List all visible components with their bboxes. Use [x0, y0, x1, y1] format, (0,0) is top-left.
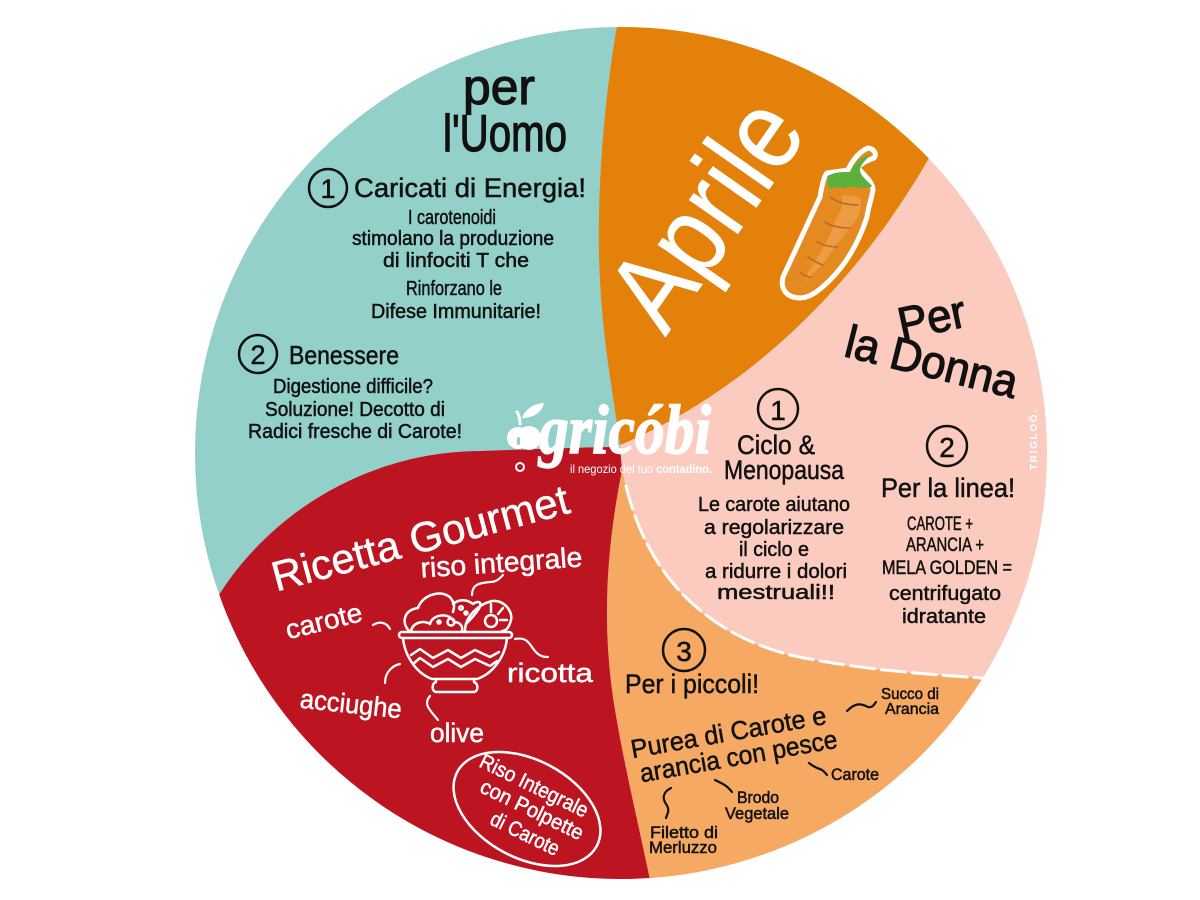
- recipe name ellipse: [434, 729, 620, 889]
- block: caricati di energia: I carotenoidi: [408, 207, 496, 229]
- logo: agricobi: il negozio del tuo contadino.: [570, 462, 712, 476]
- heading: ricetta gourmet: Ricetta Gourmet: [266, 476, 574, 600]
- block: per i piccoli: Merluzzo: [649, 838, 717, 857]
- ingredient labels: olive: [430, 718, 484, 748]
- block: ciclo e menopausa: mestruali!!: [717, 582, 835, 604]
- block: per la linea: idratante: [902, 606, 986, 628]
- block: caricati di energia: Caricati di Energia!: [354, 173, 586, 203]
- segment: aprile: [598, 27, 929, 445]
- block: per i piccoli: [625, 629, 939, 857]
- logo: agricobi: [507, 392, 712, 476]
- block: caricati di energia: di linfociti T che: [383, 250, 529, 272]
- block: caricati di energia: 1: [320, 174, 336, 204]
- block: per la linea: ARANCIA +: [906, 535, 984, 556]
- block: caricati di energia: stimolano la produzione: [352, 228, 554, 250]
- block: benessere: 2: [250, 340, 266, 370]
- dashed divider: [626, 486, 982, 678]
- heading: aprile: Aprile: [583, 75, 828, 351]
- recipe name ellipse: con Polpette: [476, 775, 587, 845]
- block: per la linea: Per la linea!: [881, 473, 1015, 503]
- heading: per la donna: la Donna: [840, 315, 1024, 408]
- block: per i piccoli: Per i piccoli!: [625, 669, 759, 699]
- block: benessere: Benessere: [289, 340, 399, 370]
- block: per la linea: [881, 426, 1015, 628]
- block: per i piccoli: Filetto di: [650, 823, 718, 842]
- wheel segments: [190, 10, 1060, 890]
- segment: per i piccoli: [607, 470, 1000, 890]
- segment: ricetta gourmet: [200, 447, 652, 890]
- block: ciclo e menopausa: Menopausa: [724, 455, 845, 485]
- block: per i piccoli: Succo di: [881, 686, 939, 703]
- block: ciclo e menopausa: a ridurre i dolori: [705, 561, 847, 583]
- recipe name ellipse: Riso Integrale: [476, 750, 592, 822]
- icon: bowl: [399, 594, 512, 692]
- block: per i piccoli: Arancia: [885, 701, 939, 718]
- heading: per l'uomo: per: [463, 59, 535, 115]
- block: ciclo e menopausa: [698, 389, 850, 604]
- block: benessere: Soluzione! Decotto di: [265, 399, 445, 421]
- block: per i piccoli: Carote: [831, 765, 879, 784]
- recipe name ellipse: di Carote: [487, 808, 563, 861]
- block: per la linea: CAROTE +: [907, 514, 973, 535]
- block: ciclo e menopausa: a regolarizzare: [704, 517, 844, 539]
- segment: per l'uomo: [190, 20, 690, 620]
- ingredient labels: carote: [282, 597, 365, 645]
- block: benessere: Radici fresche di Carote!: [248, 421, 462, 443]
- block: per la linea: 2: [939, 432, 955, 463]
- block: per la linea: MELA GOLDEN =: [882, 558, 1012, 579]
- segment: per la donna: [620, 158, 1047, 678]
- block: benessere: [239, 335, 462, 443]
- ingredient labels: riso integrale: [419, 541, 583, 584]
- block: per i piccoli: 3: [676, 636, 692, 667]
- block: ciclo e menopausa: il ciclo e: [739, 539, 809, 561]
- credit: TRIGLOÖ.: [1027, 410, 1040, 470]
- heading: per l'uomo: [443, 59, 567, 163]
- block: caricati di energia: Difese Immunitarie!: [371, 301, 541, 323]
- heading: per la donna: Per: [893, 285, 970, 350]
- block: per la linea: centrifugato: [889, 583, 1001, 605]
- icon: carrot pepper: [782, 148, 875, 298]
- block: benessere: Digestione difficile?: [273, 376, 433, 398]
- block: caricati di energia: Rinforzano le: [406, 278, 502, 300]
- block: per i piccoli: Purea di Carote e: [628, 700, 829, 764]
- block: ciclo e menopausa: Le carote aiutano: [698, 494, 850, 516]
- ingredient labels: acciughe: [299, 684, 403, 724]
- block: per i piccoli: Vegetale: [725, 804, 789, 823]
- ingredient labels: ricotta: [507, 658, 594, 688]
- block: ciclo e menopausa: Ciclo &: [737, 430, 815, 460]
- heading: per l'uomo: l'Uomo: [443, 105, 567, 163]
- logo: agricobi: gricóbi: [537, 392, 711, 469]
- ingredient labels: [282, 541, 594, 748]
- block: caricati di energia: [309, 169, 586, 323]
- block: ciclo e menopausa: 1: [770, 395, 786, 426]
- block: per i piccoli: Brodo: [737, 788, 779, 807]
- infographic wheel: [195, 27, 1047, 879]
- block: per i piccoli: arancia con pesce: [637, 724, 840, 788]
